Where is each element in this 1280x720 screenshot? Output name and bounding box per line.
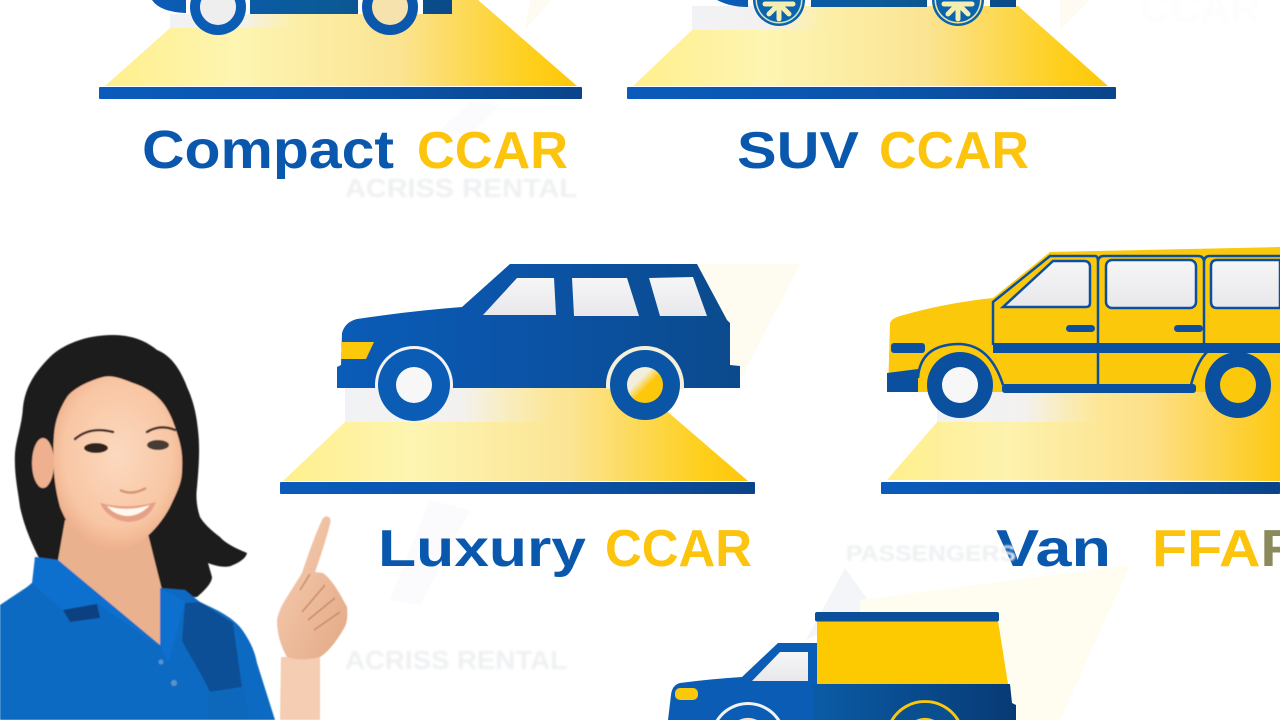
SUV ramp (633, 6, 1108, 86)
luxury car body (337, 264, 740, 424)
teeth (107, 505, 150, 516)
shirt buttons (158, 660, 177, 686)
right collar (160, 588, 185, 663)
luxury ramp (283, 388, 748, 481)
compact platform (99, 87, 582, 99)
hair (15, 335, 247, 600)
luxury platform (280, 482, 755, 494)
shirt (0, 557, 275, 720)
eyebrows (75, 427, 175, 439)
van platform (881, 482, 1280, 494)
smile (100, 502, 156, 522)
nose shadow (120, 488, 146, 493)
luxury code: CCAR (605, 520, 752, 578)
pointing hand (277, 516, 347, 720)
compact label: Compact (142, 120, 394, 180)
compact car body (152, 0, 452, 35)
van body (887, 247, 1280, 418)
cargo van body (668, 612, 1016, 720)
faint watermark text: PASSENGERS (846, 541, 1016, 566)
compact ramp shadow (170, 14, 298, 28)
panel: compact car (99, 0, 582, 180)
van ramp shadow (937, 392, 1097, 422)
pocket (208, 689, 250, 720)
SUV platform (627, 87, 1116, 99)
panel: cargo van (668, 612, 1016, 720)
panel: luxury car (280, 264, 755, 578)
SUV ramp shadow (692, 6, 827, 30)
left collar (32, 557, 160, 647)
luxury ramp shadow (345, 388, 555, 422)
eyes (84, 443, 108, 453)
faint watermark text: ACRISS RENTAL (345, 173, 577, 203)
collar shadow (63, 604, 100, 622)
luxury label: Luxury (378, 520, 586, 578)
neck (58, 520, 162, 645)
panel: van (881, 247, 1280, 578)
van label: Van (996, 520, 1111, 578)
SUV code: CCAR (879, 122, 1029, 180)
SUV label: SUV (737, 122, 859, 180)
compact ramp (105, 0, 577, 86)
presenter woman (0, 335, 347, 720)
faint watermark text: ACRISS RENTAL (345, 645, 567, 675)
shirt shadow (182, 602, 242, 692)
panel: SUV (627, 0, 1116, 180)
compact code: CCAR (417, 122, 568, 180)
faint watermark text (345, 0, 1260, 675)
face (53, 376, 182, 550)
SUV body (717, 0, 1016, 26)
faint background shapes (390, 0, 1130, 720)
ear (32, 438, 54, 488)
van ramp (887, 392, 1280, 481)
